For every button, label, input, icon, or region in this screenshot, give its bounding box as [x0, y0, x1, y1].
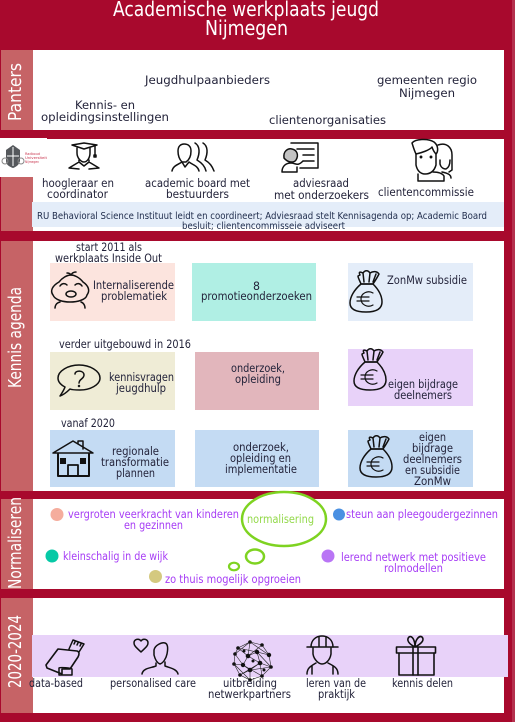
- card: onderzoek, opleiding: [195, 352, 319, 410]
- feature labels: praktijk: [318, 687, 355, 701]
- card: eigen bijdrage en subsidie: en subsidie: [405, 463, 460, 477]
- title: Nijmegen: [205, 16, 288, 40]
- icon: network: [232, 640, 273, 682]
- feature labels: uitbreiding: [223, 676, 277, 690]
- icon: data stick: [46, 640, 84, 675]
- card: promotieonderzoeken: 8: [253, 279, 260, 293]
- icon: money bag: [354, 349, 386, 390]
- role labels: academic board met: [145, 176, 250, 190]
- icon: money bag: [360, 436, 392, 477]
- card: onderzoek, opleiding en implementatie: onderzoek,: [233, 440, 289, 454]
- partners label: Panters: [6, 63, 26, 121]
- normaliseren label: Normaliseren: [6, 497, 26, 589]
- item: lerend netwerk: lerend netwerk met positieve: [341, 550, 486, 564]
- logo: Radboud Universiteit: Universiteit: [25, 156, 48, 160]
- card: onderzoek, opleiding: onderzoek,: [231, 361, 285, 375]
- icon: construction worker: [307, 636, 338, 674]
- purple band: [32, 635, 508, 677]
- role labels: clientencommissie: [378, 185, 474, 199]
- card: internaliserende problematiek: [50, 263, 175, 321]
- icon: personalised care: [134, 639, 178, 674]
- panel: organisation: [0, 138, 504, 232]
- card: ZonMw subsidie: [348, 263, 473, 321]
- partner names: Jeugdhulpaanbieders: [144, 73, 270, 87]
- card: promotieonderzoeken: promotieonderzoeken: [201, 289, 312, 303]
- panel: kennis agenda: [1, 240, 504, 491]
- card: onderzoek, opleiding en implementatie: implementatie: [225, 462, 297, 476]
- kennis agenda label: Kennis agenda: [6, 287, 26, 388]
- panel: normaliseren: [1, 492, 504, 589]
- logo: Radboud Universiteit: Radboud: [25, 152, 40, 156]
- card: regionale transformatie plannen: regionale: [112, 444, 159, 458]
- thought bubble: normalisering: [229, 492, 326, 570]
- icon: baby: [52, 272, 89, 308]
- logo: Radboud Universiteit: [0, 138, 48, 177]
- card: eigen bijdrage deelnemers: eigen bijdrage: [388, 377, 458, 391]
- item: thuis opgroeien: zo thuis mogelijk opgroeien: [165, 572, 301, 586]
- partner names: Nijmegen: [399, 86, 455, 100]
- callout: roles: [32, 202, 504, 232]
- partner names: Kennis- en: [75, 98, 135, 112]
- partner names: clientenorganisaties: [269, 113, 386, 127]
- icon: question bubble: [58, 365, 100, 396]
- callout: roles: besluit; clientencommisseie adviseert: [182, 221, 345, 232]
- thought bubble: normalisering: normalisering: [247, 512, 314, 526]
- item: veerkracht: vergroten veerkracht van kinderen: [68, 507, 239, 521]
- icon: clients: [412, 139, 452, 181]
- panel: partners: [1, 50, 504, 130]
- card: onderzoek, opleiding en implementatie: opleiding en: [230, 451, 291, 465]
- icon: money bag: [350, 271, 382, 312]
- role labels: hoogleraar en: [42, 176, 114, 190]
- heading: vanaf 2020: vanaf 2020: [61, 416, 115, 430]
- feature labels: personalised care: [110, 676, 196, 690]
- icon: graduate: [69, 143, 99, 169]
- feature labels: netwerkpartners: [208, 687, 291, 701]
- heading: start 2011: werkplaats Inside Out: [55, 251, 162, 265]
- card: kennisvragen jeugdhulp: jeugdhulp: [115, 381, 166, 395]
- card: regionale transformatie plannen: transformatie: [101, 455, 169, 469]
- feature labels: kennis delen: [392, 676, 453, 690]
- card: eigen bijdrage deelnemers: [348, 349, 473, 406]
- title: [113, 0, 379, 40]
- card: regionale transformatie plannen: [50, 430, 175, 487]
- partner names: opleidingsinstellingen: [41, 110, 169, 124]
- card: eigen bijdrage deelnemers: deelnemers: [394, 388, 452, 402]
- role labels: bestuurders: [166, 187, 229, 201]
- card: onderzoek, opleiding: opleiding: [235, 372, 281, 386]
- card: internaliserende problematiek: problematiek: [101, 289, 167, 303]
- logo: Radboud Universiteit: Nijmegen: [25, 160, 39, 164]
- item: thuis opgroeien: [149, 570, 301, 586]
- icon: academic board: [172, 143, 214, 171]
- item: lerend netwerk: [322, 550, 486, 575]
- role labels: met onderzoekers: [274, 188, 369, 202]
- card: ZonMw subsidie: ZonMw subsidie: [387, 273, 467, 287]
- feature labels: data-based: [29, 676, 83, 690]
- card: promotieonderzoeken: [192, 263, 316, 321]
- 2020-2024 label: 2020-2024: [6, 615, 26, 688]
- card: internaliserende problematiek: Internaliserende: [93, 278, 174, 292]
- icon: advisory board: [282, 143, 318, 172]
- heading: start 2011: start 2011 als: [76, 240, 142, 254]
- item: lerend netwerk: rolmodellen: [384, 561, 443, 575]
- card: eigen bijdrage en subsidie: ZonMw: [414, 474, 451, 488]
- item: veerkracht: [50, 507, 239, 532]
- icon: gift: [396, 637, 436, 675]
- partner names: [41, 73, 477, 127]
- card: eigen bijdrage en subsidie: [348, 430, 473, 488]
- card: kennisvragen jeugdhulp: [50, 352, 175, 410]
- item: kleinschalig: kleinschalig in de wijk: [63, 549, 168, 563]
- feature labels: [29, 676, 453, 701]
- role labels: [42, 176, 474, 202]
- role labels: coordinator: [47, 187, 108, 201]
- icon: house: [53, 441, 93, 476]
- panel: 2020-2024: [1, 598, 508, 713]
- heading: start 2011: [55, 240, 162, 265]
- card: eigen bijdrage en subsidie: deelnemers: [403, 452, 462, 466]
- feature labels: leren van de: [306, 676, 366, 690]
- item: veerkracht: en gezinnen: [124, 518, 183, 532]
- partner names: gemeenten regio: [377, 73, 477, 87]
- card: kennisvragen jeugdhulp: kennisvragen: [109, 370, 174, 384]
- heading: 2016: verder uitgebouwd in 2016: [59, 337, 191, 351]
- card: eigen bijdrage en subsidie: eigen: [419, 430, 446, 444]
- card: onderzoek, opleiding en implementatie: [195, 430, 319, 487]
- role labels: adviesraad: [293, 176, 349, 190]
- card: regionale transformatie plannen: plannen: [116, 466, 155, 480]
- card: eigen bijdrage en subsidie: bijdrage: [412, 441, 453, 455]
